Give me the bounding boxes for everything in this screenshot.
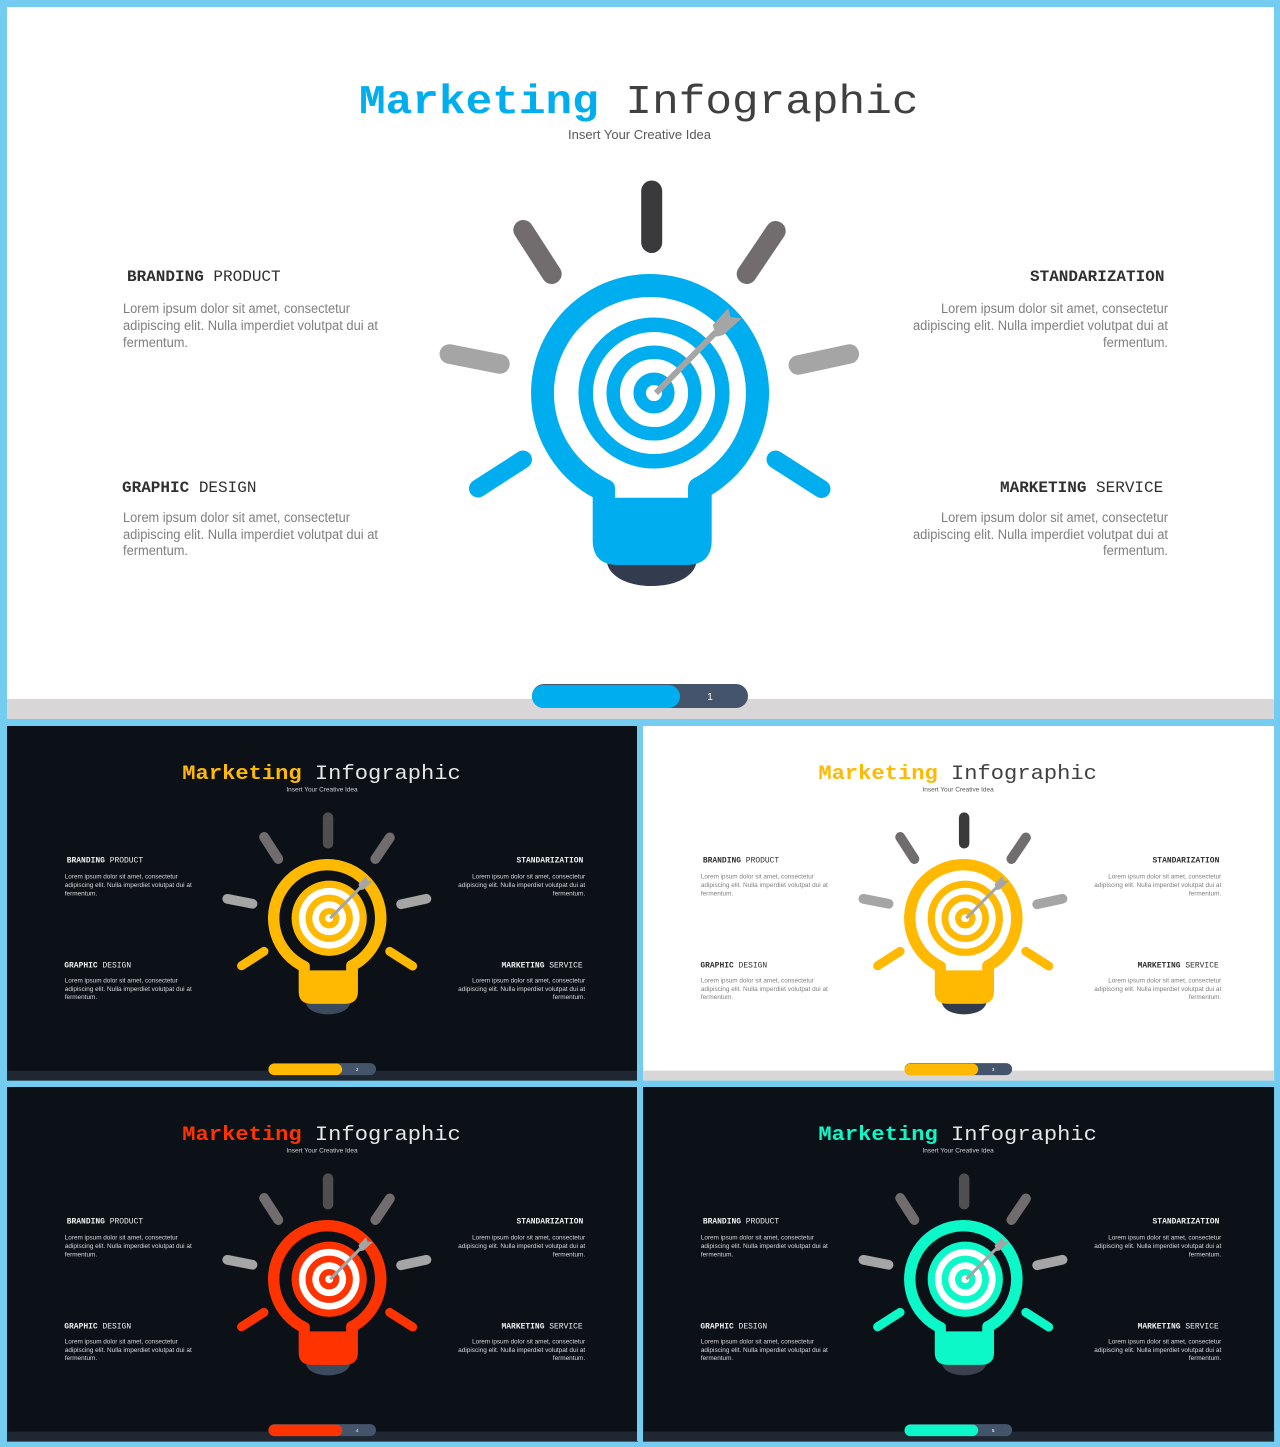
icon: light rays xyxy=(227,818,426,966)
icon: dart arrow xyxy=(656,308,742,393)
icon: dart arrow xyxy=(966,876,1009,918)
icon: bulb outline and base xyxy=(904,1220,1023,1365)
text block: marketing service: Lorem ipsum dolor sit amet, consectetur xyxy=(941,510,1169,525)
subtitle: Insert Your Creative Idea xyxy=(922,1148,994,1155)
text block: graphic design: Lorem ipsum dolor sit amet, consectetur xyxy=(701,977,815,984)
icon: light rays xyxy=(227,1179,426,1327)
text block: graphic design: Lorem ipsum dolor sit amet, consectetur xyxy=(701,1338,815,1345)
text block: graphic design: Lorem ipsum dolor sit amet, consectetur xyxy=(65,1338,179,1345)
icon: dart arrow xyxy=(330,1237,373,1279)
icon: bulb cap xyxy=(942,1001,987,1014)
text block: marketing service: fermentum. xyxy=(1189,1355,1221,1362)
progress pill xyxy=(268,1063,376,1075)
text block: branding product: BRANDING PRODUCT xyxy=(703,856,779,865)
progress pill xyxy=(905,1063,1012,1075)
text block: branding product: Lorem ipsum dolor sit amet, consectetur xyxy=(701,1234,815,1241)
panel: white yellow slide xyxy=(643,726,1274,1081)
icon: bulb cap xyxy=(306,1362,350,1375)
text block: graphic design: fermentum. xyxy=(65,1355,97,1362)
text block: standarization: fermentum. xyxy=(553,890,585,897)
progress pill: 4 xyxy=(356,1428,359,1434)
text block: graphic design xyxy=(700,1323,828,1362)
text block: branding product: adipiscing elit. Nulla imperdiet volutpat dui at xyxy=(123,318,378,333)
text block: graphic design xyxy=(700,962,828,1001)
panel: main blue slide xyxy=(7,7,1274,719)
text block: graphic design: adipiscing elit. Nulla imperdiet volutpat dui at xyxy=(701,1347,828,1354)
text block: branding product: fermentum. xyxy=(65,1251,97,1258)
text block: standarization xyxy=(458,1217,586,1258)
text block: branding product: Lorem ipsum dolor sit amet, consectetur xyxy=(123,301,351,316)
text block: graphic design: Lorem ipsum dolor sit amet, consectetur xyxy=(123,510,351,525)
text block: standarization: Lorem ipsum dolor sit amet, consectetur xyxy=(1108,873,1222,880)
text block: branding product: Lorem ipsum dolor sit amet, consectetur xyxy=(65,873,179,880)
icon: light rays xyxy=(449,191,849,489)
panel: dark teal slide xyxy=(643,1087,1274,1442)
chart: target rings xyxy=(586,325,722,461)
progress pill xyxy=(905,1424,1012,1436)
title: Marketing Infographic xyxy=(182,1124,461,1146)
text block: graphic design xyxy=(122,479,378,558)
text block: branding product: BRANDING PRODUCT xyxy=(127,268,281,286)
text block: marketing service xyxy=(1094,1323,1222,1362)
text block: marketing service: fermentum. xyxy=(1103,543,1168,558)
icon: bulb outline and base xyxy=(531,274,769,565)
text block: marketing service: Lorem ipsum dolor sit amet, consectetur xyxy=(472,1338,586,1345)
text block: marketing service xyxy=(1094,962,1222,1001)
chart: target rings xyxy=(292,881,367,956)
text block: marketing service: fermentum. xyxy=(1189,994,1221,1001)
text block: marketing service: adipiscing elit. Nulla imperdiet volutpat dui at xyxy=(913,527,1168,542)
text block: branding product xyxy=(123,268,378,350)
text block: branding product: BRANDING PRODUCT xyxy=(67,856,143,865)
subtitle: Insert Your Creative Idea xyxy=(922,787,994,794)
text block: standarization xyxy=(1094,856,1222,897)
text block: graphic design: fermentum. xyxy=(123,543,188,558)
text block: branding product xyxy=(701,856,828,897)
text block: standarization: adipiscing elit. Nulla imperdiet volutpat dui at xyxy=(913,318,1168,333)
progress pill xyxy=(532,684,748,708)
text block: marketing service: fermentum. xyxy=(553,994,585,1001)
text block: graphic design: fermentum. xyxy=(701,1355,733,1362)
text block: branding product xyxy=(65,856,192,897)
text block: marketing service: adipiscing elit. Nulla imperdiet volutpat dui at xyxy=(458,1347,585,1354)
text block: marketing service xyxy=(458,1323,586,1362)
text block: graphic design: GRAPHIC DESIGN xyxy=(122,479,256,497)
text block: standarization: fermentum. xyxy=(1189,1251,1221,1258)
title: Marketing Infographic xyxy=(818,763,1097,785)
text block: marketing service: MARKETING SERVICE xyxy=(1138,1323,1219,1332)
chart: target rings xyxy=(928,1242,1003,1317)
text block: branding product: adipiscing elit. Nulla imperdiet volutpat dui at xyxy=(65,882,192,889)
text block: standarization: fermentum. xyxy=(1103,335,1168,350)
text block: graphic design: adipiscing elit. Nulla imperdiet volutpat dui at xyxy=(701,986,828,993)
text block: standarization: adipiscing elit. Nulla imperdiet volutpat dui at xyxy=(458,1243,585,1250)
text block: branding product: fermentum. xyxy=(65,890,97,897)
text block: standarization: STANDARIZATION xyxy=(1153,1217,1220,1226)
panel: dark red slide xyxy=(7,1087,638,1442)
text block: marketing service xyxy=(913,479,1169,558)
text block: standarization: Lorem ipsum dolor sit amet, consectetur xyxy=(1108,1234,1222,1241)
text block: standarization: STANDARIZATION xyxy=(1153,856,1220,865)
text block: graphic design: fermentum. xyxy=(701,994,733,1001)
subtitle: Insert Your Creative Idea xyxy=(286,787,358,794)
text block: graphic design xyxy=(64,962,192,1001)
text block: branding product xyxy=(701,1217,828,1258)
subtitle: Insert Your Creative Idea xyxy=(568,127,712,142)
icon: light rays xyxy=(863,818,1063,966)
title: Marketing Infographic xyxy=(359,79,918,125)
text block: marketing service: MARKETING SERVICE xyxy=(502,962,583,971)
text block: standarization: STANDARIZATION xyxy=(516,856,583,865)
panel: dark yellow slide xyxy=(7,726,638,1081)
text block: branding product: adipiscing elit. Nulla imperdiet volutpat dui at xyxy=(701,882,828,889)
text block: standarization: Lorem ipsum dolor sit amet, consectetur xyxy=(941,301,1169,316)
text block: marketing service xyxy=(458,962,586,1001)
text block: standarization: STANDARIZATION xyxy=(516,1217,583,1226)
text block: branding product xyxy=(65,1217,192,1258)
text block: standarization: adipiscing elit. Nulla imperdiet volutpat dui at xyxy=(1094,882,1221,889)
text block: graphic design: adipiscing elit. Nulla imperdiet volutpat dui at xyxy=(65,986,192,993)
text block: marketing service: MARKETING SERVICE xyxy=(1138,962,1219,971)
text block: marketing service: Lorem ipsum dolor sit amet, consectetur xyxy=(1108,977,1222,984)
progress pill xyxy=(268,1424,376,1436)
icon: bulb cap xyxy=(607,560,697,586)
text block: branding product: fermentum. xyxy=(701,1251,733,1258)
title: Marketing Infographic xyxy=(182,763,461,785)
icon: bulb cap xyxy=(306,1001,350,1014)
text block: standarization: fermentum. xyxy=(553,1251,585,1258)
text block: graphic design: GRAPHIC DESIGN xyxy=(700,1323,767,1332)
text block: graphic design xyxy=(64,1323,192,1362)
text block: branding product: adipiscing elit. Nulla imperdiet volutpat dui at xyxy=(65,1243,192,1250)
text block: branding product: adipiscing elit. Nulla imperdiet volutpat dui at xyxy=(701,1243,828,1250)
text block: marketing service: adipiscing elit. Nulla imperdiet volutpat dui at xyxy=(458,986,585,993)
text block: marketing service: adipiscing elit. Nulla imperdiet volutpat dui at xyxy=(1094,986,1221,993)
text block: standarization: Lorem ipsum dolor sit amet, consectetur xyxy=(472,1234,586,1241)
progress pill: 1 xyxy=(707,692,713,703)
text block: graphic design: Lorem ipsum dolor sit amet, consectetur xyxy=(65,977,179,984)
text block: branding product: BRANDING PRODUCT xyxy=(703,1217,779,1226)
text block: branding product: Lorem ipsum dolor sit amet, consectetur xyxy=(65,1234,179,1241)
icon: dart arrow xyxy=(330,876,373,918)
text block: marketing service: fermentum. xyxy=(553,1355,585,1362)
chart: target rings xyxy=(931,884,999,952)
text block: standarization: fermentum. xyxy=(1189,890,1221,897)
icon: bulb outline and base xyxy=(268,1220,386,1365)
icon: bulb cap xyxy=(942,1362,987,1375)
icon: bulb outline and base xyxy=(904,859,1023,1004)
subtitle: Insert Your Creative Idea xyxy=(286,1148,358,1155)
progress pill: 5 xyxy=(992,1428,995,1434)
icon: light rays xyxy=(863,1179,1063,1327)
text block: standarization xyxy=(1094,1217,1222,1258)
icon: dart arrow xyxy=(966,1237,1009,1279)
text block: graphic design: GRAPHIC DESIGN xyxy=(64,962,131,971)
text block: graphic design: GRAPHIC DESIGN xyxy=(700,962,767,971)
title: Marketing Infographic xyxy=(818,1124,1097,1146)
text block: standarization: Lorem ipsum dolor sit amet, consectetur xyxy=(472,873,586,880)
icon: bulb outline and base xyxy=(268,859,386,1004)
text block: standarization xyxy=(913,268,1169,350)
text block: branding product: Lorem ipsum dolor sit amet, consectetur xyxy=(701,873,815,880)
text block: graphic design: adipiscing elit. Nulla imperdiet volutpat dui at xyxy=(65,1347,192,1354)
progress pill: 3 xyxy=(992,1067,995,1073)
chart: target rings xyxy=(292,1242,367,1317)
progress pill: 2 xyxy=(356,1067,359,1073)
text block: marketing service: Lorem ipsum dolor sit amet, consectetur xyxy=(1108,1338,1222,1345)
text block: standarization: adipiscing elit. Nulla imperdiet volutpat dui at xyxy=(458,882,585,889)
text block: graphic design: GRAPHIC DESIGN xyxy=(64,1323,131,1332)
text block: branding product: BRANDING PRODUCT xyxy=(67,1217,143,1226)
text block: standarization: adipiscing elit. Nulla imperdiet volutpat dui at xyxy=(1094,1243,1221,1250)
text block: graphic design: adipiscing elit. Nulla imperdiet volutpat dui at xyxy=(123,527,378,542)
text block: standarization xyxy=(458,856,586,897)
text block: marketing service: MARKETING SERVICE xyxy=(502,1323,583,1332)
text block: branding product: fermentum. xyxy=(123,335,188,350)
text block: marketing service: MARKETING SERVICE xyxy=(1000,479,1163,497)
text block: marketing service: Lorem ipsum dolor sit amet, consectetur xyxy=(472,977,586,984)
text block: branding product: fermentum. xyxy=(701,890,733,897)
text block: graphic design: fermentum. xyxy=(65,994,97,1001)
text block: standarization: STANDARIZATION xyxy=(1030,268,1164,286)
text block: marketing service: adipiscing elit. Nulla imperdiet volutpat dui at xyxy=(1094,1347,1221,1354)
